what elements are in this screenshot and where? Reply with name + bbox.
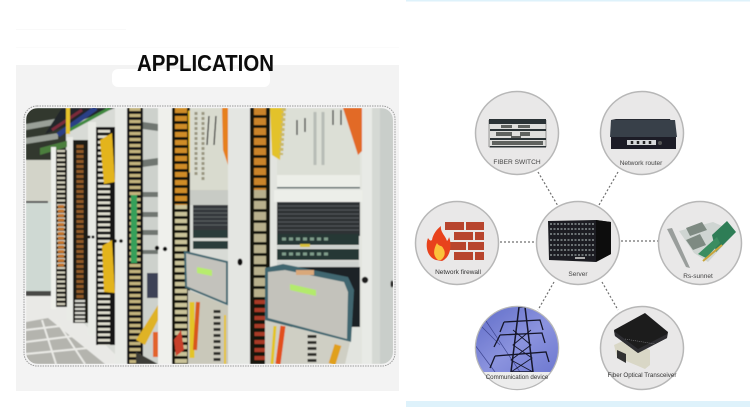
heading: application: APPLICATION [137,50,274,76]
icon: router [610,119,677,149]
node: communication device [475,306,560,392]
decorative right panel edges [406,0,750,407]
icon: switch stack [489,119,546,148]
node: network firewall: Network firewall [435,269,481,276]
node: rs-sunnet [658,202,742,284]
node: rs-sunnet: Rs-sunnet [683,273,713,280]
node: server [536,202,620,284]
node: network firewall [416,202,498,284]
icon: media converters [614,313,668,369]
connectors: dotted lines [500,172,658,310]
photo: transmission tower [475,306,560,392]
node: fiber optical transceiver [600,306,684,390]
icon: brick wall with flame [427,222,484,261]
node: server: Server [568,271,588,278]
node: network router [600,92,684,174]
node: network router: Network router [620,160,663,167]
node: fiber switch [476,92,558,174]
icon: network card [667,221,736,268]
node: fiber optical transceiver: Fiber Optical Transceiver [608,372,676,379]
panel: application [16,29,399,391]
node: fiber switch: FIBER SWITCH [493,159,541,166]
node: communication device: Communication device [486,374,549,381]
icon: blade server [548,220,611,262]
photo: server racks [24,106,395,366]
